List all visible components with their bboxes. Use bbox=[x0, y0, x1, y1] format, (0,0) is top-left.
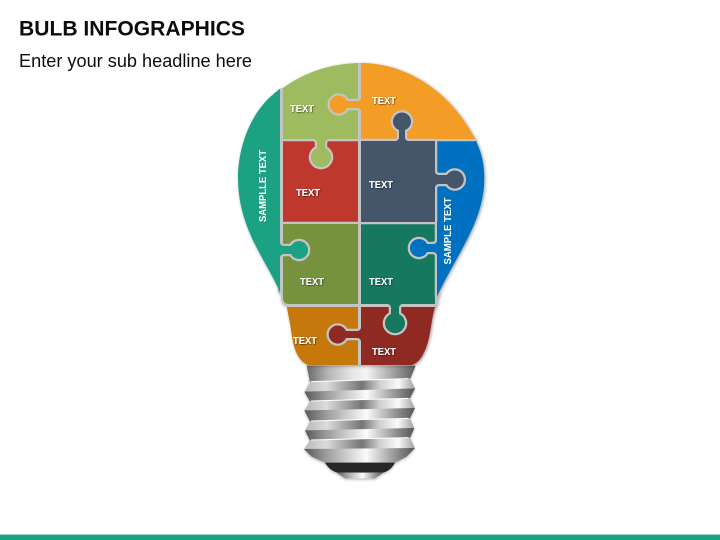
bottom bar bbox=[0, 534, 720, 540]
thread bands bbox=[304, 378, 415, 463]
thread highlights bbox=[311, 379, 408, 440]
piece: maroon bbox=[329, 307, 435, 365]
label: dark green: TEXT bbox=[369, 277, 393, 288]
label: teal vertical: SAMPLLE TEXT bbox=[258, 150, 269, 222]
subtitle: Enter your sub headline here bbox=[19, 51, 252, 71]
black contact bbox=[325, 463, 395, 473]
title: BULB INFOGRAPHICS bbox=[19, 16, 245, 40]
piece: slate bbox=[361, 113, 464, 222]
piece labels bbox=[290, 96, 396, 358]
bulb screw base bbox=[304, 366, 416, 478]
piece: olive bbox=[283, 224, 358, 304]
bottom nub bbox=[337, 473, 383, 478]
piece: amber bbox=[287, 307, 358, 365]
label: amber: TEXT bbox=[293, 336, 317, 347]
piece: light green bbox=[283, 63, 358, 167]
piece: dark green bbox=[361, 224, 435, 333]
label: olive: TEXT bbox=[300, 277, 324, 288]
label: slate: TEXT bbox=[369, 180, 393, 191]
piece: teal bbox=[238, 89, 308, 293]
piece: blue bbox=[410, 141, 484, 297]
label: maroon: TEXT bbox=[372, 347, 396, 358]
puzzle bulb bbox=[238, 63, 484, 365]
label: light green: TEXT bbox=[290, 104, 314, 115]
label: red: TEXT bbox=[296, 188, 320, 199]
piece: orange bbox=[330, 63, 475, 139]
piece: red bbox=[283, 141, 358, 222]
collar bbox=[307, 366, 416, 383]
label: blue vertical: SAMPLE TEXT bbox=[443, 198, 454, 264]
label: orange: TEXT bbox=[372, 96, 396, 107]
